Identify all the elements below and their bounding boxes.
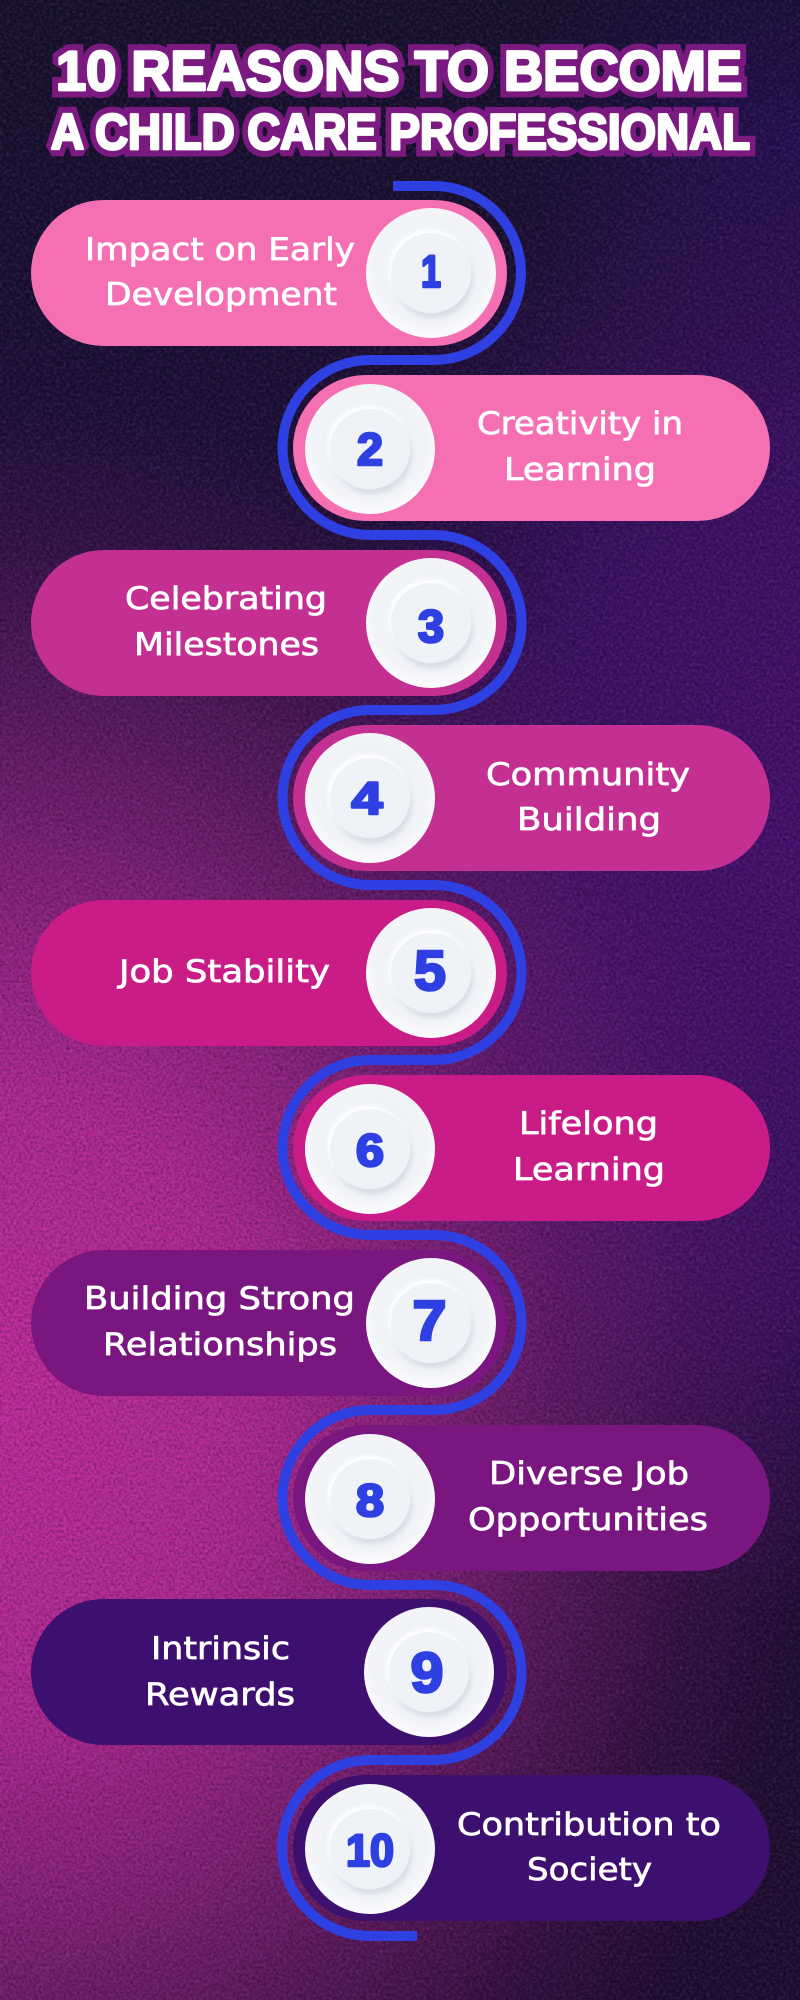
panel: reason 3 xyxy=(31,550,507,696)
panel: reason 6 xyxy=(293,1075,770,1221)
title: 10 REASONS TO BECOME xyxy=(56,39,742,102)
panel: reason 6: Learning xyxy=(513,1152,665,1188)
panel: reason 8 xyxy=(293,1425,770,1571)
panel: reason 4: Community xyxy=(486,757,690,793)
panel: reason 7 xyxy=(31,1250,507,1396)
panel: reason 9: Intrinsic xyxy=(151,1631,290,1667)
panel: reason 2: 2 xyxy=(357,424,383,475)
panel: reason 9: 9 xyxy=(410,1641,444,1705)
panel: reason 1: Impact on Early xyxy=(85,232,355,268)
panel: reason 6: 6 xyxy=(356,1125,384,1176)
panel: reason 4: Building xyxy=(517,802,661,838)
panel: reason 7: 7 xyxy=(412,1289,446,1353)
panel: reason 7: Building Strong xyxy=(84,1281,355,1317)
panel: reason 3: 3 xyxy=(418,601,444,652)
panel: reason 4: 4 xyxy=(352,773,382,824)
panel: reason 8: Diverse Job xyxy=(489,1456,689,1492)
panel: reason 1: Development xyxy=(105,277,337,313)
panel: reason 3: Celebrating xyxy=(125,581,327,617)
panel: reason 8: Opportunities xyxy=(468,1502,708,1538)
panel: reason 6: Lifelong xyxy=(519,1106,658,1142)
panel: reason 7: Relationships xyxy=(103,1327,337,1363)
panel: reason 10 xyxy=(293,1775,770,1921)
panel: reason 2: Learning xyxy=(504,452,656,488)
panel: reason 1: 1 xyxy=(421,246,441,297)
panel: reason 2 xyxy=(293,375,770,521)
panel: reason 8: 8 xyxy=(356,1475,384,1526)
panel: reason 5: 5 xyxy=(414,939,446,1003)
title: A CHILD CARE PROFESSIONAL xyxy=(51,104,750,160)
panel: reason 9 xyxy=(31,1599,507,1745)
panel: reason 10: Society xyxy=(527,1852,652,1888)
panel: reason 4 xyxy=(293,725,770,871)
title: 10 REASONS TO BECOME xyxy=(56,39,742,102)
panel: reason 3: Milestones xyxy=(134,627,319,663)
winding blue connector line xyxy=(282,186,522,1936)
panel: reason 2: Creativity in xyxy=(477,406,683,442)
panel: reason 5: Job Stability xyxy=(117,954,330,990)
title: A CHILD CARE PROFESSIONAL xyxy=(51,104,750,160)
panel: reason 5 xyxy=(31,900,507,1046)
panel: reason 10: Contribution to xyxy=(457,1807,721,1843)
title xyxy=(51,39,750,160)
panel: reason 10: 10 xyxy=(346,1825,394,1876)
panel: reason 1 xyxy=(31,200,507,346)
panel: reason 9: Rewards xyxy=(145,1677,295,1713)
